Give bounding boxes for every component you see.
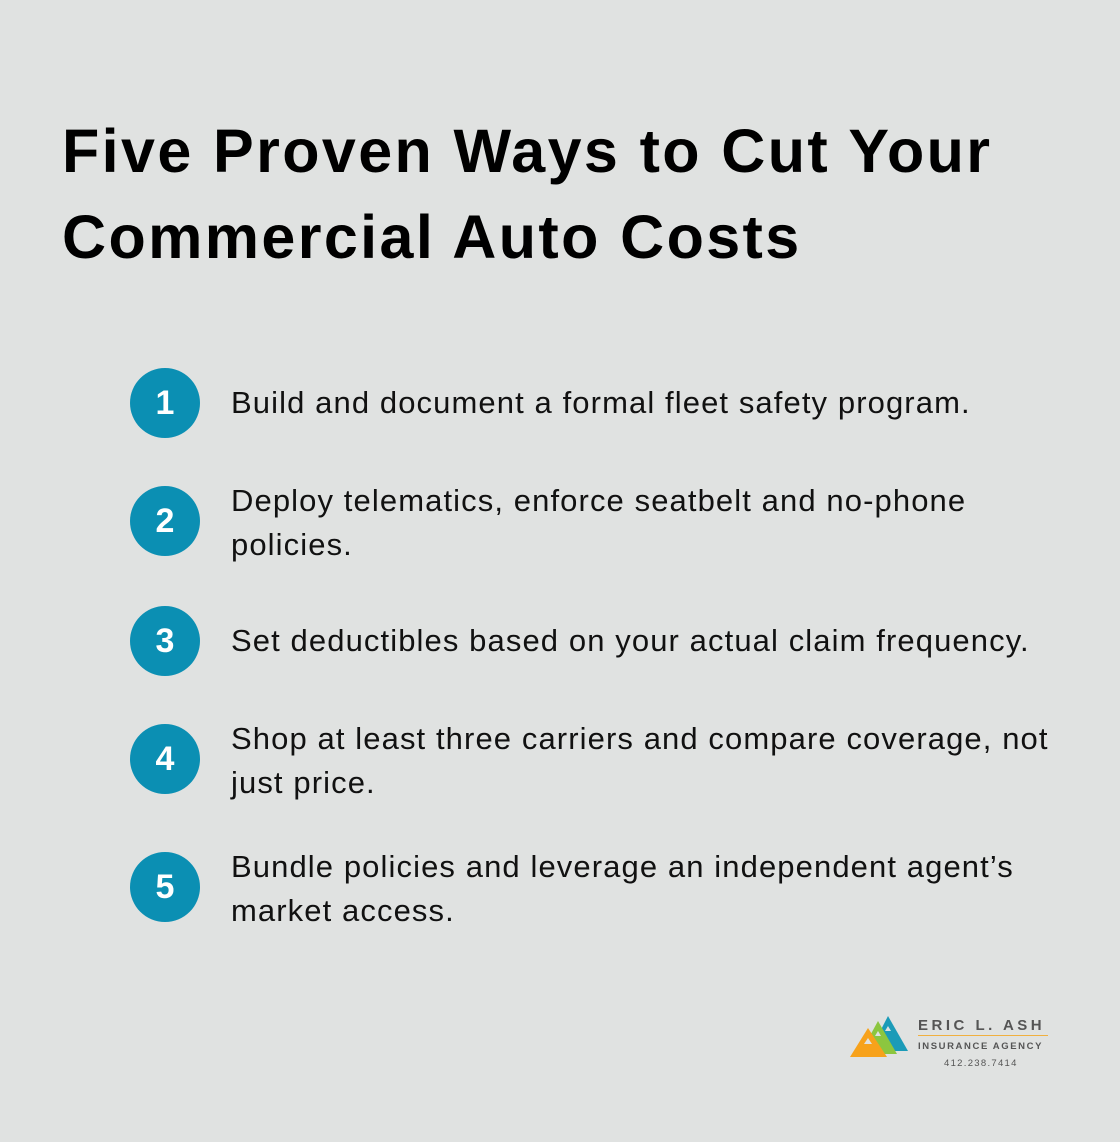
number 4 — [130, 724, 200, 794]
number 3 — [130, 606, 200, 676]
number 3: 3 — [156, 622, 174, 660]
text 2: Deploy telematics, enforce seatbelt and no-phone policies. — [231, 483, 966, 562]
item 5 — [130, 849, 1014, 928]
title — [62, 117, 992, 271]
item 3 — [130, 606, 1030, 676]
logo: 412.238.7414 — [944, 1058, 1018, 1069]
number 5: 5 — [156, 868, 174, 906]
text 5: Bundle policies and leverage an independent agent’s market access. — [231, 849, 1014, 928]
number 2: 2 — [156, 502, 174, 540]
title: Five Proven Ways to Cut Your — [62, 117, 992, 185]
text 4: Shop at least three carriers and compare coverage, not just price. — [231, 721, 1049, 800]
logo text: ERIC L. ASH — [918, 1017, 1045, 1034]
item 1 — [130, 368, 971, 438]
title: Commercial Auto Costs — [62, 203, 802, 271]
icon: mountains — [850, 1016, 908, 1057]
number 4: 4 — [156, 740, 174, 778]
number 1: 1 — [156, 384, 174, 422]
logo — [850, 1016, 1048, 1069]
logo: INSURANCE AGENCY — [918, 1041, 1043, 1052]
number 1 — [130, 368, 200, 438]
item 4 — [130, 721, 1049, 800]
text 3: Set deductibles based on your actual claim frequency. — [231, 623, 1030, 658]
item 2 — [130, 483, 966, 562]
number 5 — [130, 852, 200, 922]
text 1: Build and document a formal fleet safety program. — [231, 385, 971, 420]
number 2 — [130, 486, 200, 556]
